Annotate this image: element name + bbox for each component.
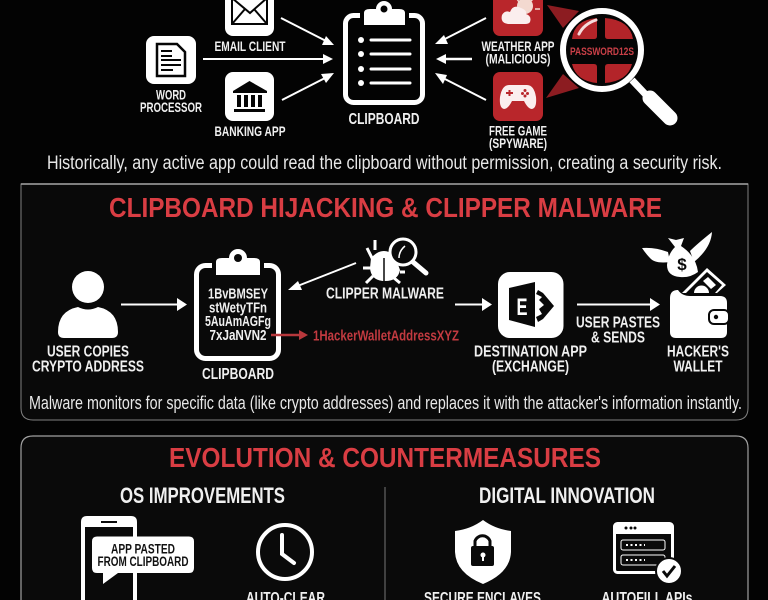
icon: user [58, 271, 118, 338]
label: destination app exchange: (EXCHANGE) [492, 358, 569, 376]
label: user copies crypto address [32, 344, 144, 376]
icon: auto-clear clock [258, 525, 312, 579]
label: word processor: WORD [156, 86, 186, 102]
arrow: replacement in red [271, 330, 308, 340]
heading: digital innovation: DIGITAL INNOVATION [479, 483, 655, 508]
label: clipper malware: CLIPPER MALWARE [326, 286, 444, 302]
label: user pastes and sends: USER PASTES [576, 314, 660, 332]
icon: magnifying glass over password: PASSWORD12S [570, 46, 634, 58]
label: free game [489, 122, 547, 151]
arrow: malware to clipboard [288, 263, 356, 290]
icon: banking app [225, 72, 274, 121]
panel: clipboard hijacking [21, 184, 748, 420]
label: destination app exchange [474, 344, 587, 376]
icon: destination app exchange [498, 272, 564, 338]
label: weather app: WEATHER APP [482, 38, 554, 54]
label: user copies crypto address: USER COPIES [47, 344, 129, 360]
icon: hacker wallet [670, 268, 729, 338]
icon: secure enclave shield [455, 520, 511, 584]
label: hacker's wallet [667, 344, 729, 376]
label: email client: EMAIL CLIENT [214, 38, 286, 54]
label: user pastes and sends [576, 314, 660, 346]
label: hacker's wallet: HACKER'S [667, 344, 729, 360]
label: weather app: (MALICIOUS) [486, 50, 550, 66]
arrows: malicious apps to clipboard [435, 18, 486, 100]
icon: weather app [493, 0, 543, 36]
arrow: malware to destination app [455, 298, 492, 311]
callout: app pasted from clipboard [92, 536, 194, 584]
icon: autofill window with check [614, 523, 682, 584]
label: hacker's wallet: WALLET [674, 358, 723, 376]
arrow: user to clipboard [121, 298, 187, 311]
callout: app pasted from clipboard: APP PASTED [111, 542, 175, 556]
label: destination app exchange: DESTINATION APP [474, 344, 587, 360]
icon: clipboard [346, 1, 422, 102]
label: free game: (SPYWARE) [489, 135, 547, 151]
icon: magnifying glass over password [546, 5, 670, 118]
label: clipboard: CLIPBOARD [202, 366, 274, 383]
icon: free game [493, 72, 543, 121]
icon: flying money bag: $ [677, 255, 687, 274]
column divider [384, 487, 386, 600]
callout: app pasted from clipboard: FROM CLIPBOARD [98, 554, 189, 569]
heading: clipboard hijacking: CLIPBOARD HIJACKING & CLIPPER MALWARE [109, 192, 662, 223]
label: weather app [482, 38, 554, 66]
icon: clipboard with crypto address [196, 249, 278, 358]
icon: email client [225, 0, 274, 36]
label: user pastes and sends: & SENDS [591, 330, 645, 346]
icon: clipboard with crypto address: 5AuAmAGFg [205, 313, 271, 330]
label: free game: FREE GAME [489, 122, 547, 138]
label: word processor: PROCESSOR [140, 99, 202, 115]
arrows: apps to clipboard [203, 18, 334, 100]
icon: bug with magnifier [363, 239, 426, 283]
heading: os improvements: OS IMPROVEMENTS [120, 483, 285, 508]
text: hacker wallet address: 1HackerWalletAddressXYZ [313, 328, 459, 344]
icon: clipboard with crypto address: stWetyTFn [209, 300, 267, 316]
label: word processor [140, 86, 202, 115]
label: clipboard: CLIPBOARD [348, 111, 420, 128]
heading: evolution and countermeasures: EVOLUTION & COUNTERMEASURES [169, 442, 601, 473]
icon: destination app exchange: E [516, 294, 528, 321]
icon: phone with paste notice [83, 518, 194, 600]
icon: word processor [146, 36, 196, 84]
icon: clipboard with crypto address: 7xJaNVN2 [210, 327, 266, 344]
label: user copies crypto address: CRYPTO ADDRESS [32, 358, 144, 376]
icon: flying money bag [642, 232, 712, 277]
label: banking app: BANKING APP [214, 123, 286, 139]
icon: clipboard with crypto address: 1BvBMSEY [208, 286, 268, 302]
panel: evolution and countermeasures [21, 436, 748, 600]
arrow: paste and send [577, 298, 660, 311]
